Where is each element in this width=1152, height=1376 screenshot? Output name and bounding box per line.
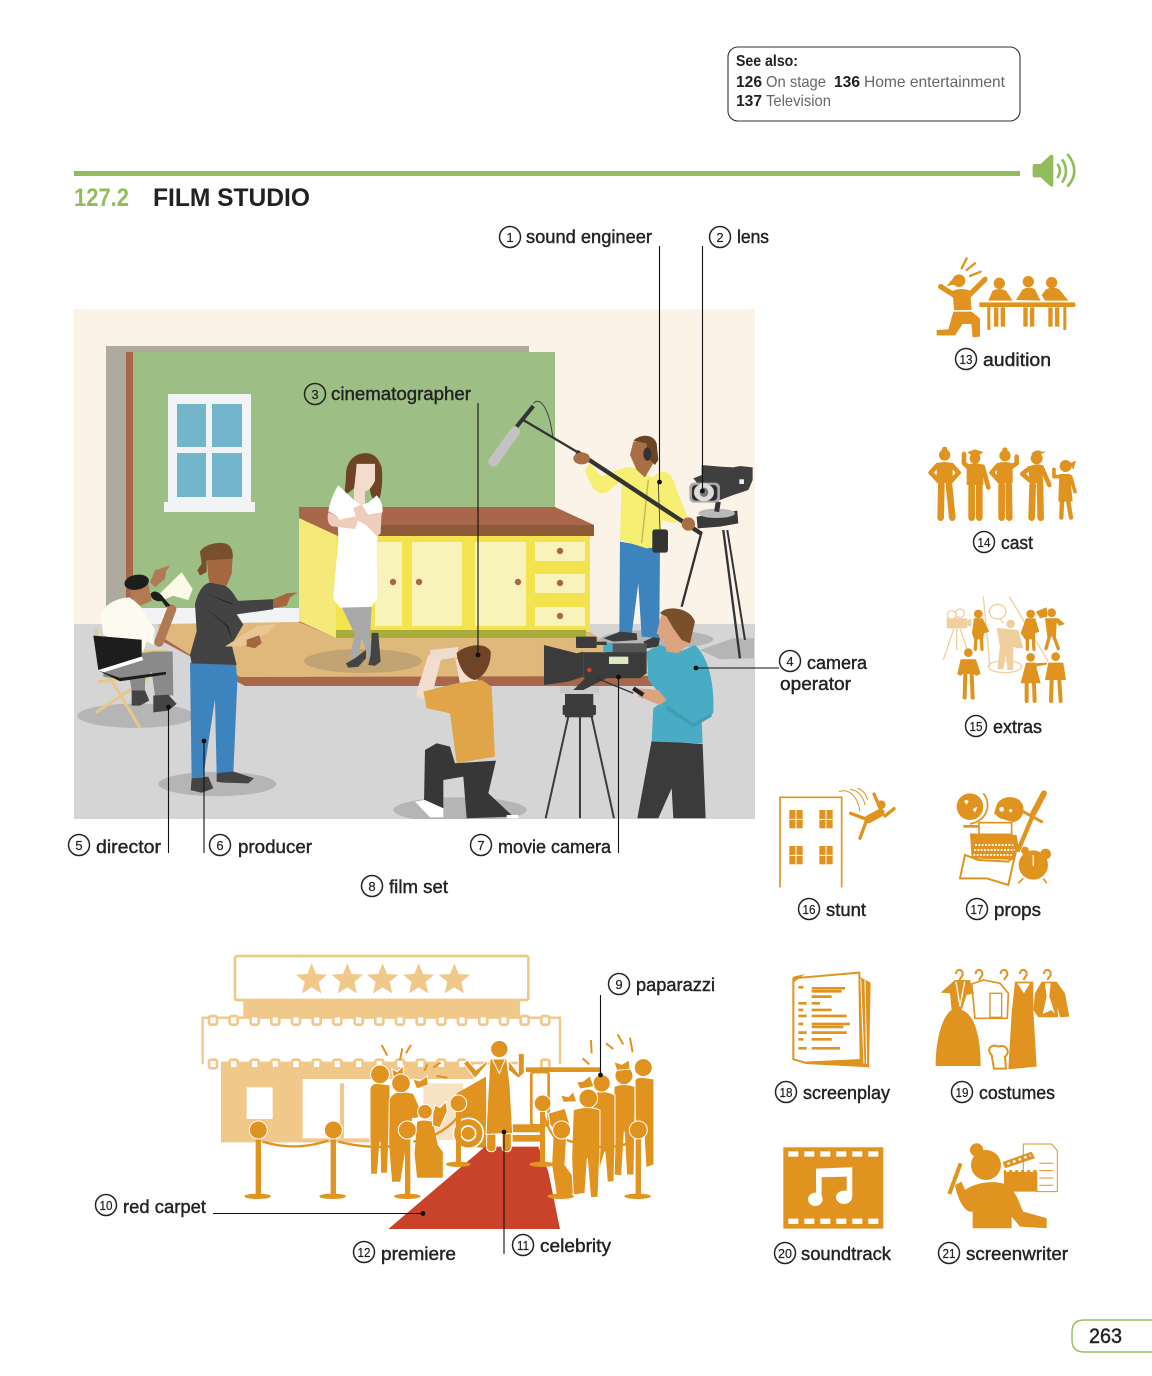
label 11 celebrity bbox=[512, 1234, 611, 1256]
icon: screenwriter bbox=[949, 1143, 1057, 1228]
premiere illustration bbox=[203, 956, 654, 1229]
red carpet bbox=[388, 1147, 560, 1229]
label 7 movie camera: 7 bbox=[477, 838, 485, 853]
see also box: See also: bbox=[736, 53, 798, 70]
label 10 red carpet: 10 bbox=[100, 1198, 112, 1213]
icon: costumes bbox=[936, 970, 1069, 1069]
label 18 screenplay: 18 bbox=[780, 1085, 792, 1100]
label 2 lens: lens bbox=[737, 227, 769, 247]
stage floor bbox=[158, 621, 653, 686]
label 6 producer: producer bbox=[238, 837, 312, 857]
globe bbox=[957, 793, 988, 828]
see also box: 136 bbox=[834, 74, 860, 91]
photographers left group bbox=[370, 1045, 447, 1182]
label 16 stunt bbox=[798, 898, 866, 920]
see also box bbox=[728, 47, 1020, 121]
label 15 extras: extras bbox=[993, 717, 1042, 737]
background camera on tripod bbox=[682, 465, 753, 658]
label 4 camera operator: operator bbox=[780, 674, 851, 694]
label 13 audition: 13 bbox=[960, 352, 972, 367]
kitchen counter bbox=[299, 507, 594, 638]
label 20 soundtrack: 20 bbox=[778, 1246, 792, 1261]
boom microphone bbox=[493, 401, 553, 462]
see also box: 137 bbox=[736, 93, 762, 110]
cinematographer bbox=[393, 645, 527, 823]
icon: speaker bbox=[1033, 154, 1074, 187]
icon: screenplay bbox=[793, 973, 871, 1067]
label 9 paparazzi: paparazzi bbox=[636, 975, 715, 995]
studio backdrop bbox=[74, 309, 755, 819]
label 1 sound engineer: sound engineer bbox=[526, 227, 652, 247]
tripod shadow and boom operator shadow bbox=[600, 630, 754, 659]
label 14 cast: cast bbox=[1001, 533, 1033, 553]
label 8 film set: 8 bbox=[368, 879, 376, 894]
actress bbox=[328, 453, 383, 668]
see also box: 126 bbox=[736, 74, 762, 91]
open book bbox=[960, 855, 1015, 885]
label 14 cast: 14 bbox=[978, 535, 990, 550]
page number tab: 263 bbox=[1089, 1325, 1122, 1348]
label 3 cinematographer: cinematographer bbox=[331, 384, 471, 404]
label 13 audition: audition bbox=[983, 350, 1051, 370]
label 5 director: 5 bbox=[75, 838, 83, 853]
label 1 sound engineer: 1 bbox=[506, 230, 514, 245]
label 19 costumes bbox=[952, 1082, 1055, 1103]
section rule bbox=[74, 171, 1020, 176]
label 6 producer: 6 bbox=[216, 838, 224, 853]
label 10 red carpet: red carpet bbox=[123, 1197, 206, 1217]
producer bbox=[158, 543, 297, 796]
label 6 producer bbox=[210, 834, 312, 857]
label 21 screenwriter: 21 bbox=[942, 1246, 956, 1261]
sword bbox=[1018, 793, 1044, 850]
label 14 cast bbox=[974, 532, 1033, 553]
label 3 cinematographer: 3 bbox=[311, 387, 319, 402]
label 12 premiere: 12 bbox=[358, 1245, 370, 1260]
label 4 camera operator: 4 bbox=[786, 654, 794, 669]
label 5 director: director bbox=[96, 837, 161, 857]
icon: cast bbox=[931, 447, 1076, 518]
label 11 celebrity: celebrity bbox=[540, 1236, 611, 1256]
label 11 celebrity: 11 bbox=[517, 1238, 529, 1253]
icon: stunt bbox=[780, 788, 894, 887]
title: 127.2 bbox=[74, 184, 129, 212]
label 17 props: 17 bbox=[970, 902, 984, 917]
see also box: Home entertainment bbox=[864, 74, 1006, 91]
typewriter bbox=[970, 823, 1018, 860]
icon: props bbox=[957, 793, 1051, 885]
label 13 audition bbox=[956, 348, 1051, 370]
alarm clock bbox=[1018, 847, 1051, 883]
label 10 red carpet bbox=[96, 1194, 206, 1217]
label 2 lens bbox=[710, 226, 769, 248]
label 2 lens: 2 bbox=[716, 230, 724, 245]
celebrity bbox=[463, 1040, 524, 1152]
limousine bbox=[453, 1067, 601, 1148]
movie camera on tripod bbox=[544, 637, 647, 818]
camera operator bbox=[637, 608, 714, 818]
label 12 premiere: premiere bbox=[381, 1244, 456, 1264]
window bbox=[164, 394, 255, 512]
label 8 film set: film set bbox=[389, 877, 448, 897]
leader lines bbox=[166, 246, 779, 1254]
label 20 soundtrack bbox=[774, 1242, 892, 1264]
extras background: camera and spotlight bbox=[943, 597, 1048, 673]
label 16 stunt: 16 bbox=[802, 902, 816, 917]
see also box: On stage bbox=[766, 74, 826, 91]
see also box: Television bbox=[766, 93, 831, 110]
label 15 extras bbox=[966, 716, 1042, 737]
label 21 screenwriter: screenwriter bbox=[966, 1244, 1068, 1264]
cinema sign with stars bbox=[235, 956, 528, 1017]
label 9 paparazzi: 9 bbox=[615, 977, 623, 992]
label 18 screenplay: screenplay bbox=[803, 1083, 890, 1103]
label 4 camera operator: camera bbox=[807, 653, 868, 673]
label 15 extras: 15 bbox=[970, 719, 982, 734]
skull bbox=[994, 797, 1024, 822]
label 17 props: props bbox=[994, 900, 1041, 920]
label 19 costumes: 19 bbox=[956, 1085, 968, 1100]
label 9 paparazzi bbox=[608, 974, 715, 995]
label 12 premiere bbox=[354, 1242, 456, 1264]
label 7 movie camera: movie camera bbox=[498, 837, 612, 857]
film set illustration bbox=[74, 309, 755, 823]
label 4 camera operator bbox=[780, 650, 868, 694]
label 17 props bbox=[966, 898, 1041, 920]
label 5 director bbox=[68, 834, 161, 857]
page number tab bbox=[1072, 1320, 1152, 1352]
cinema building bbox=[221, 1062, 523, 1142]
rope barriers bbox=[244, 1095, 651, 1199]
label 8 film set bbox=[362, 876, 448, 897]
extras foreground people bbox=[957, 607, 1066, 683]
icon: audition bbox=[937, 258, 1075, 337]
label 16 stunt: stunt bbox=[826, 900, 866, 920]
title: FILM STUDIO bbox=[153, 184, 310, 212]
icon: extras bbox=[943, 597, 1066, 701]
label 20 soundtrack: soundtrack bbox=[801, 1244, 892, 1264]
director in chair bbox=[77, 565, 195, 728]
photographers right group paparazzi bbox=[548, 1034, 654, 1198]
title bbox=[74, 184, 310, 212]
label 19 costumes: costumes bbox=[979, 1083, 1055, 1103]
icon: soundtrack bbox=[783, 1147, 883, 1229]
film strip marquee bbox=[203, 1016, 560, 1068]
sound engineer bbox=[523, 420, 702, 648]
